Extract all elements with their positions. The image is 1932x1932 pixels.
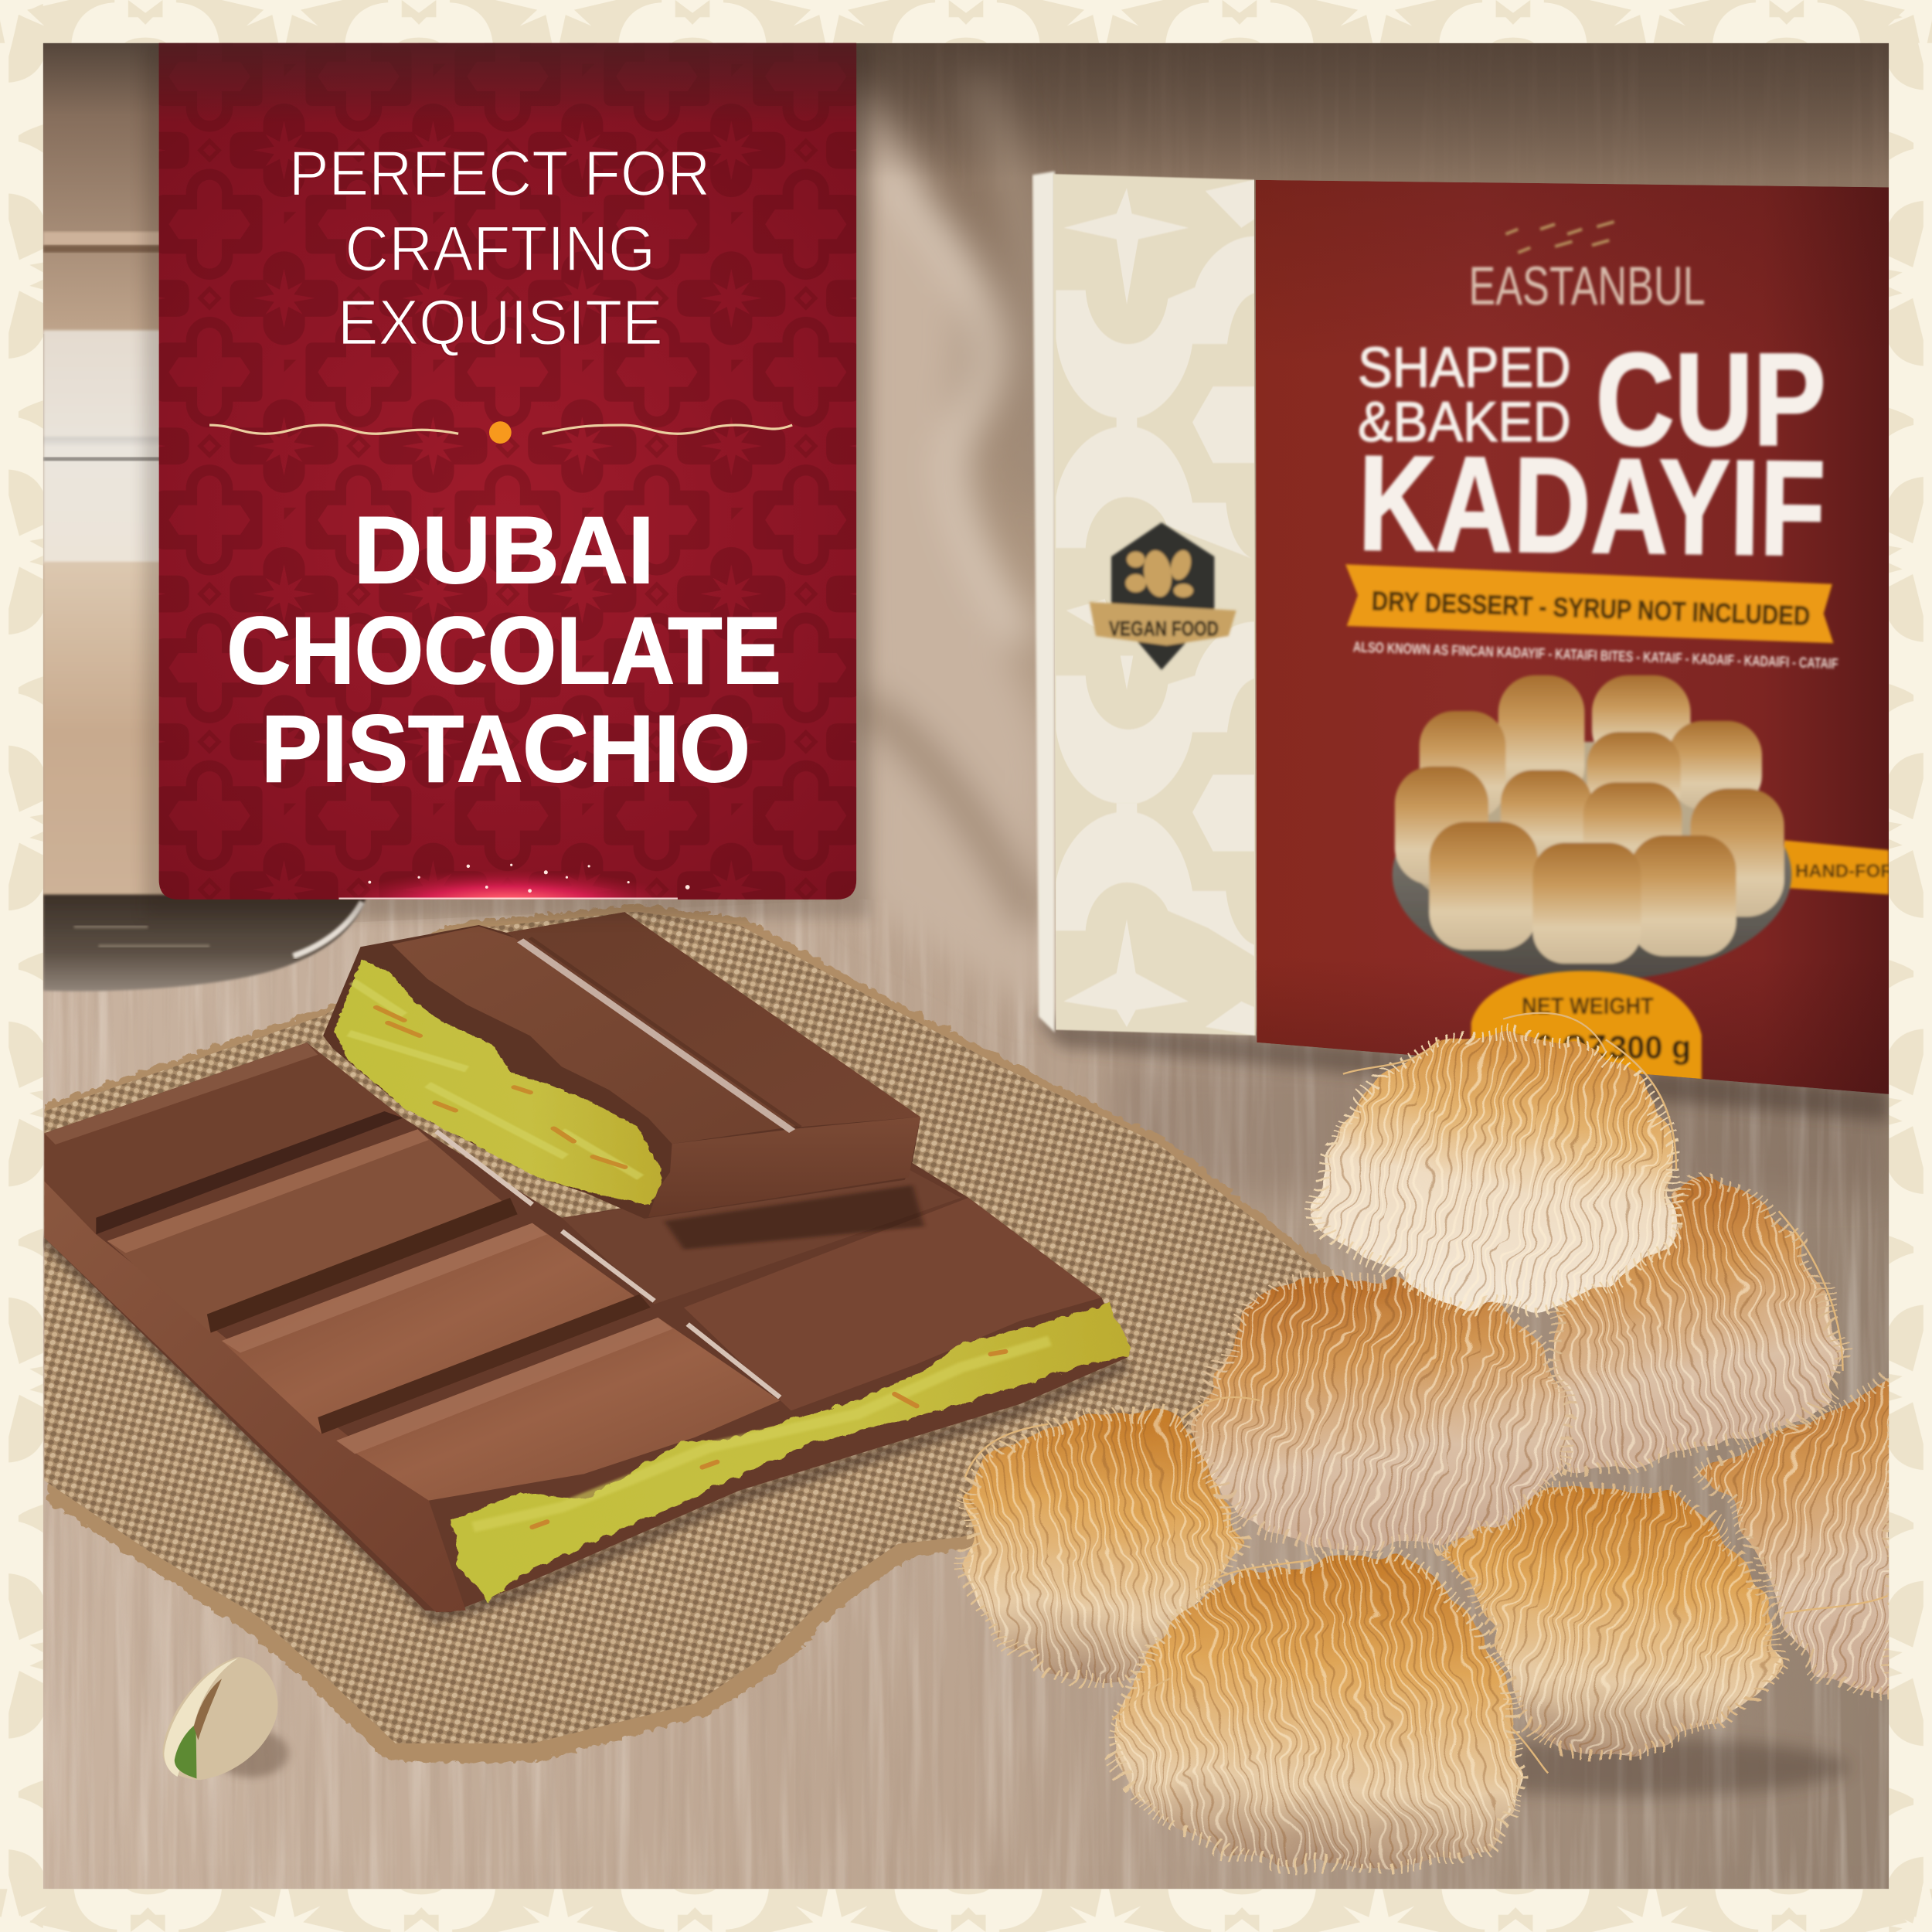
main title: PISTACHIO [261,696,750,802]
pistachio shell [162,1657,288,1780]
hand-formed tag [1774,840,1932,895]
kadayif: far right [1696,1377,1894,1696]
intro text: EXQUISITE [338,287,663,359]
cream side panel with pattern [1053,174,1256,1036]
glass of milk [43,43,367,992]
kadayif: centre [1189,1275,1568,1549]
net weight badge [1471,971,1702,1097]
vegan food badge: VEGAN FOOD [1109,617,1219,641]
bar body [44,1043,1128,1612]
intro text [289,138,710,359]
chocolate segments [44,1043,1101,1501]
net weight badge: 300 g [1609,1029,1691,1066]
kadayif box [1032,172,1932,1121]
net weight badge: NET WEIGHT [1522,994,1654,1019]
brand logo [1469,222,1706,316]
hand-formed tag: HAND-FORMED [1795,861,1932,882]
intro text: CRAFTING [345,213,655,284]
kadayif: top [1318,1034,1675,1308]
kadayif: back right [1446,1488,1776,1756]
net weight badge: 10.6 OZ [1491,1028,1607,1064]
pile of kadayif cups [965,1013,1894,1869]
kadayif: right middle [1554,1179,1840,1471]
main title: CHOCOLATE [226,598,781,704]
main bar [44,1043,1130,1617]
product name: KADAYIF [1358,427,1826,584]
intro text: PERFECT FOR [289,138,710,209]
ribbon: DRY DESSERT - SYRUP NOT INCLUDED [1371,586,1811,631]
product name: &BAKED [1358,390,1571,454]
product name: SHAPED [1358,336,1571,400]
kadayif: left [968,1412,1241,1686]
main title [226,498,781,802]
vegan food badge [1090,522,1236,670]
kadayif: front [1112,1556,1517,1869]
burlap cloth [44,902,1331,1760]
box spine [1032,172,1055,1032]
broken top piece [323,912,924,1250]
bowl of baked cups [1393,675,1791,981]
ribbon [1345,564,1838,672]
product name [1358,327,1826,584]
bottom glow with sparkles [335,864,690,937]
loose strands [965,1013,1888,1773]
product name: CUP [1596,327,1826,474]
chocolate bar with pistachio filling [44,912,1130,1617]
red headline panel [145,43,871,937]
brand logo: EASTANBUL [1469,255,1706,316]
wavy ornament divider with dot [209,421,792,444]
pistachio filling, front break [451,1302,1130,1600]
red front of the box [1256,180,1932,1097]
main title: DUBAI [354,498,655,604]
